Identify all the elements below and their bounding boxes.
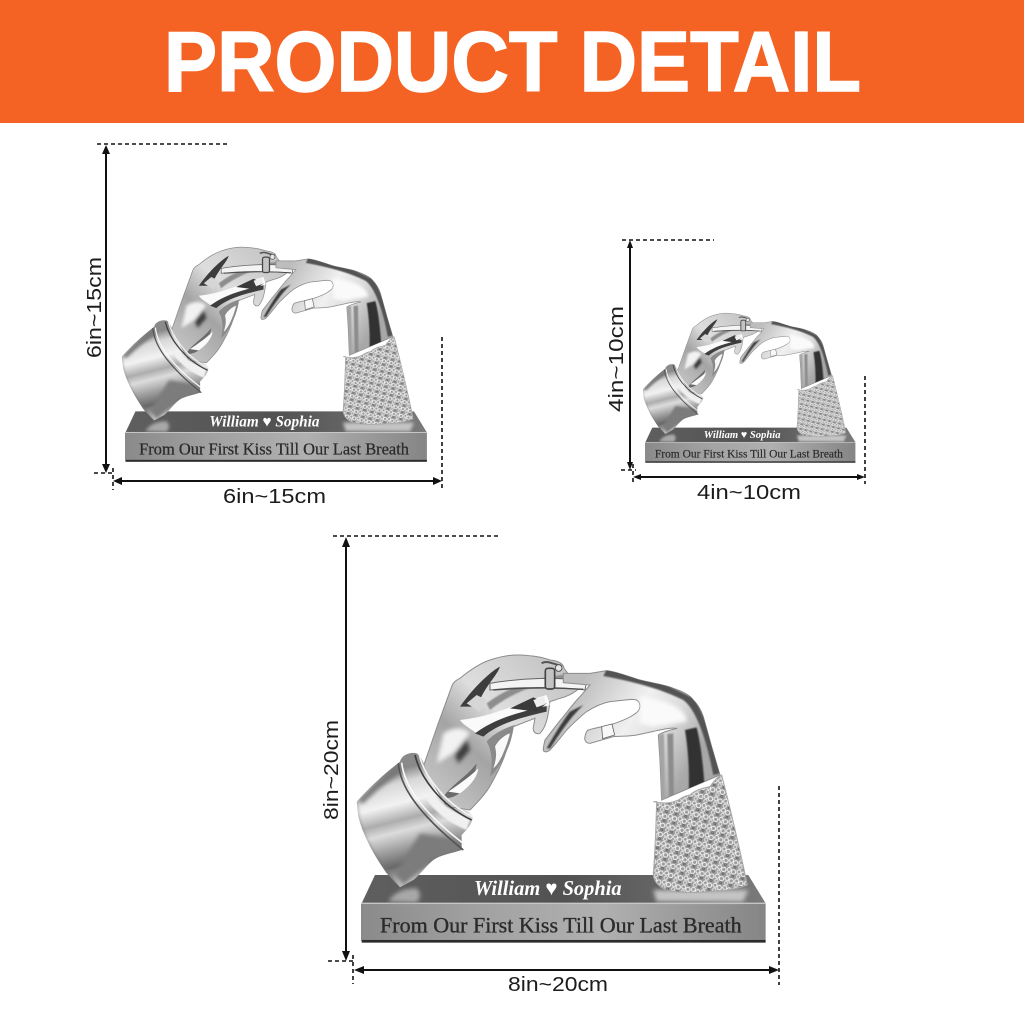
header banner bbox=[0, 0, 1024, 123]
sculpture: small: William ♥ Sophia bbox=[704, 429, 781, 441]
sculpture: small: From Our First Kiss Till Our Last Breath bbox=[655, 449, 843, 461]
sculpture: large: From Our First Kiss Till Our Last Breath bbox=[380, 913, 742, 938]
height dimension arrow: large bbox=[328, 536, 501, 961]
sculpture: small bbox=[641, 313, 855, 463]
height dimension arrow: medium bbox=[94, 144, 227, 473]
sculpture: medium: From Our First Kiss Till Our Last Breath bbox=[139, 439, 409, 458]
height label: medium: 6in~15cm bbox=[84, 257, 106, 358]
sculpture: large bbox=[353, 655, 766, 943]
width label: large: 8in~20cm bbox=[508, 974, 608, 996]
sculpture: medium: William ♥ Sophia bbox=[209, 413, 320, 430]
width dimension arrow: small bbox=[633, 376, 865, 484]
title: PRODUCT DETAIL bbox=[164, 15, 861, 110]
sculpture: medium bbox=[119, 247, 427, 462]
medium size product: 6in by 15cm bbox=[84, 144, 442, 508]
width label: small: 4in~10cm bbox=[697, 482, 801, 504]
small size product: 4in by 10cm bbox=[606, 240, 865, 504]
width dimension arrow: medium bbox=[113, 337, 442, 490]
width label: medium: 6in~15cm bbox=[223, 486, 326, 508]
sculpture: large: William ♥ Sophia bbox=[474, 878, 622, 900]
height label: large: 8in~20cm bbox=[321, 720, 343, 820]
width dimension arrow: large bbox=[353, 786, 779, 985]
height dimension arrow: small bbox=[621, 240, 714, 470]
large size product: 8in by 20cm bbox=[321, 536, 779, 996]
height label: small: 4in~10cm bbox=[606, 306, 628, 412]
